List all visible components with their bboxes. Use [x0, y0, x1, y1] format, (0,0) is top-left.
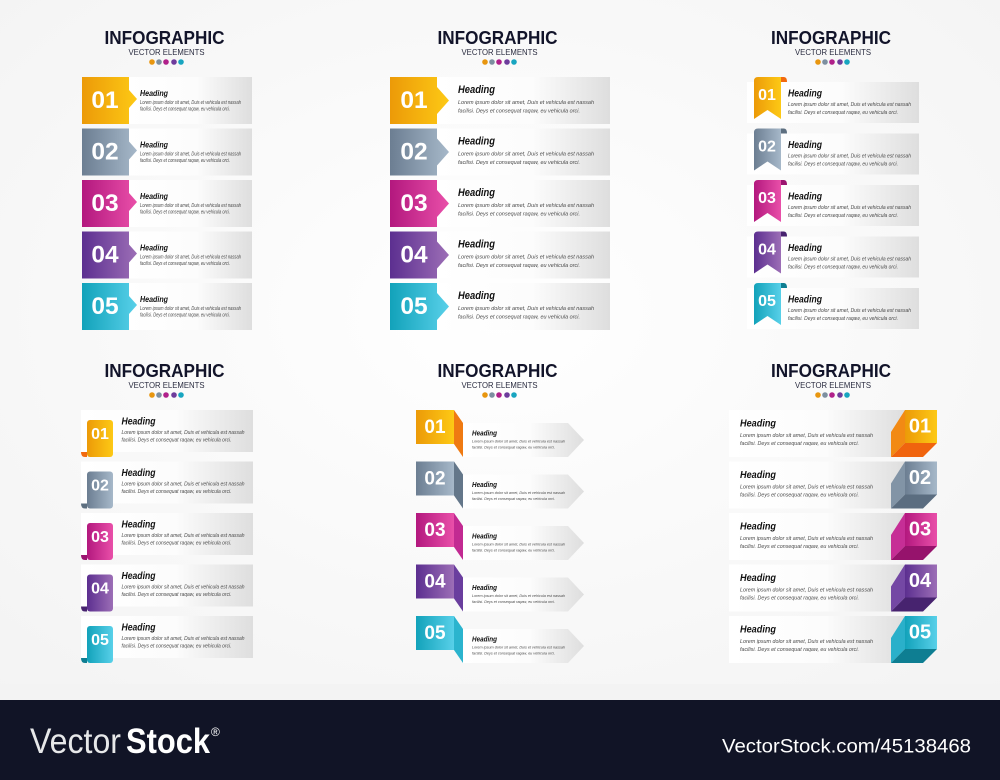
- step 02: [416, 462, 584, 508]
- step 02: 02: [758, 138, 776, 156]
- step 01: Lorem ipsum dolor sit amet, Duis et vehicula est nassah: [788, 102, 911, 108]
- panel: infographic 2, wide arrow tabs: [390, 28, 610, 330]
- step 05: Heading: [740, 624, 777, 636]
- step 04: [82, 232, 252, 278]
- step 02: Lorem ipsum dolor sit amet, Duis et vehicula est nassah: [140, 152, 241, 158]
- step 01: [82, 77, 252, 124]
- step 03: Heading: [740, 520, 777, 532]
- step 02: Lorem ipsum dolor sit amet, Duis et vehicula est nassah: [788, 154, 911, 160]
- step 05: Lorem ipsum dolor sit amet, Duis et vehicula est nassah: [122, 636, 245, 642]
- step 02: facilisi. Deys et consequat raqaw, eu vehicula orci.: [140, 158, 230, 164]
- step 05: [82, 283, 252, 330]
- step 05: [729, 616, 937, 663]
- bottom strip above footer: [0, 684, 1000, 700]
- title block 1: VECTOR ELEMENTS: [128, 47, 205, 57]
- step 03: facilisi. Deys et consequat raqaw, eu vehicula orci.: [788, 213, 898, 219]
- title block 5: [438, 361, 558, 398]
- step 03: 03: [400, 190, 428, 217]
- step 03: [416, 513, 584, 560]
- step 01: 01: [909, 416, 931, 438]
- step 01: facilisi. Deys et consequat raqaw, eu vehicula orci.: [140, 106, 230, 112]
- step 04: Lorem ipsum dolor sit amet, Duis et vehicula est nassah: [458, 254, 594, 260]
- step 05: 05: [91, 293, 119, 320]
- step 01: [747, 77, 919, 123]
- step 05: facilisi. Deys et consequat raqaw, eu vehicula orci.: [472, 650, 555, 656]
- step 02: 02: [91, 478, 109, 494]
- step 01: Lorem ipsum dolor sit amet, Duis et vehicula est nassah: [122, 430, 245, 436]
- step 01: Heading: [458, 84, 495, 96]
- step 05: 05: [400, 293, 428, 320]
- step 04: 04: [424, 572, 446, 592]
- step 02: Heading: [472, 480, 497, 489]
- step 03: Lorem ipsum dolor sit amet, Duis et vehicula est nassah: [458, 203, 594, 209]
- panel: infographic 6, 3D cube tabs: [729, 361, 937, 663]
- step 01: [81, 410, 253, 457]
- step 04: Heading: [140, 242, 169, 252]
- step 05: Lorem ipsum dolor sit amet, Duis et vehicula est nassah: [472, 644, 566, 650]
- step 01: facilisi. Deys et consequat raqaw, eu vehicula orci.: [788, 110, 898, 116]
- step 03: [729, 513, 937, 560]
- step 05: 05: [758, 293, 776, 310]
- step 03: Lorem ipsum dolor sit amet, Duis et vehicula est nassah: [140, 203, 241, 209]
- step 03: [81, 513, 253, 560]
- step 04: Heading: [740, 572, 777, 584]
- footer logo: Stock: [126, 722, 210, 761]
- step 01: Lorem ipsum dolor sit amet, Duis et vehicula est nassah: [140, 100, 241, 106]
- title block 3: INFOGRAPHIC: [771, 28, 891, 48]
- step 03: Lorem ipsum dolor sit amet, Duis et vehicula est nassah: [740, 536, 873, 542]
- step 05: facilisi. Deys et consequat raqaw, eu vehicula orci.: [788, 316, 898, 322]
- step 02: facilisi. Deys et consequat raqaw, eu vehicula orci.: [472, 496, 555, 501]
- step 04: Heading: [788, 243, 822, 254]
- step 05: facilisi. Deys et consequat raqaw, eu vehicula orci.: [140, 312, 230, 318]
- step 01: Heading: [788, 89, 822, 100]
- step 02: Lorem ipsum dolor sit amet, Duis et vehicula est nassah: [458, 152, 594, 158]
- step 02: 02: [909, 467, 931, 489]
- step 02: 02: [91, 138, 119, 166]
- step 05: Heading: [458, 290, 495, 302]
- step 05: [81, 616, 253, 663]
- step 01: Lorem ipsum dolor sit amet, Duis et vehicula est nassah: [472, 438, 566, 444]
- step 05: Lorem ipsum dolor sit amet, Duis et vehicula est nassah: [458, 306, 594, 312]
- title block 4: INFOGRAPHIC: [104, 361, 225, 381]
- step 03: 03: [91, 190, 119, 217]
- panel: infographic 3, bookmark ribbons: [747, 28, 919, 329]
- footer logo: Vector: [30, 722, 121, 761]
- step 01: 01: [400, 87, 428, 114]
- step 04: facilisi. Deys et consequat raqaw, eu vehicula orci.: [740, 596, 859, 602]
- step 02: facilisi. Deys et consequat raqaw, eu vehicula orci.: [122, 489, 232, 495]
- step 01: 01: [758, 87, 776, 104]
- step 05: [390, 283, 610, 330]
- step 01: facilisi. Deys et consequat raqaw, eu vehicula orci.: [740, 441, 859, 447]
- step 04: 04: [91, 242, 119, 268]
- step 05: [747, 283, 919, 329]
- step 03: [82, 180, 252, 227]
- step 03: [747, 180, 919, 226]
- step 02: [81, 462, 253, 508]
- step 03: Heading: [458, 187, 495, 199]
- step 04: Lorem ipsum dolor sit amet, Duis et vehicula est nassah: [740, 588, 873, 594]
- step 01: Heading: [140, 88, 169, 98]
- step 05: facilisi. Deys et consequat raqaw, eu vehicula orci.: [122, 644, 232, 650]
- step 05: Lorem ipsum dolor sit amet, Duis et vehicula est nassah: [140, 306, 241, 312]
- step 05: 05: [91, 632, 109, 649]
- step 01: 01: [424, 417, 446, 438]
- step 05: Heading: [788, 295, 822, 306]
- footer logo: ®: [211, 725, 220, 739]
- step 03: facilisi. Deys et consequat raqaw, eu vehicula orci.: [458, 212, 580, 218]
- step 02: [729, 462, 937, 508]
- step 02: [82, 128, 252, 176]
- step 02: [747, 128, 919, 174]
- step 04: Lorem ipsum dolor sit amet, Duis et vehicula est nassah: [472, 593, 566, 598]
- step 03: [390, 180, 610, 227]
- step 05: 05: [909, 622, 931, 644]
- step 04: [81, 564, 253, 612]
- step 01: Heading: [472, 428, 497, 438]
- step 01: facilisi. Deys et consequat raqaw, eu vehicula orci.: [458, 108, 580, 114]
- step 05: facilisi. Deys et consequat raqaw, eu vehicula orci.: [740, 647, 859, 653]
- step 03: 03: [424, 520, 446, 541]
- step 01: Lorem ipsum dolor sit amet, Duis et vehicula est nassah: [740, 433, 873, 439]
- step 04: facilisi. Deys et consequat raqaw, eu vehicula orci.: [472, 599, 555, 604]
- title block 1: INFOGRAPHIC: [104, 28, 225, 48]
- step 04: Heading: [458, 238, 495, 250]
- step 05: Lorem ipsum dolor sit amet, Duis et vehicula est nassah: [788, 308, 911, 314]
- step 05: Lorem ipsum dolor sit amet, Duis et vehicula est nassah: [740, 639, 873, 645]
- step 02: Lorem ipsum dolor sit amet, Duis et vehicula est nassah: [740, 484, 873, 490]
- step 03: Heading: [788, 192, 822, 203]
- step 04: facilisi. Deys et consequat raqaw, eu vehicula orci.: [140, 261, 230, 267]
- title block 6: VECTOR ELEMENTS: [795, 380, 871, 390]
- step 04: facilisi. Deys et consequat raqaw, eu vehicula orci.: [122, 592, 232, 598]
- panel: infographic 1, arrow tabs: [82, 28, 252, 330]
- panel: infographic 4, rounded tabs: [81, 361, 253, 663]
- title block 3: [771, 28, 891, 65]
- step 04: [416, 564, 584, 612]
- step 04: Lorem ipsum dolor sit amet, Duis et vehicula est nassah: [140, 254, 241, 260]
- step 01: 01: [91, 426, 109, 443]
- step 01: Heading: [122, 416, 156, 428]
- step 02: facilisi. Deys et consequat raqaw, eu vehicula orci.: [458, 160, 580, 166]
- step 04: facilisi. Deys et consequat raqaw, eu vehicula orci.: [458, 263, 580, 269]
- step 04: Heading: [472, 583, 497, 592]
- step 02: Heading: [140, 140, 169, 150]
- step 03: facilisi. Deys et consequat raqaw, eu vehicula orci.: [140, 210, 230, 216]
- title block 6: [771, 361, 891, 398]
- step 04: [390, 232, 610, 278]
- step 05: 05: [424, 623, 446, 644]
- step 03: facilisi. Deys et consequat raqaw, eu vehicula orci.: [740, 544, 859, 550]
- step 04: 04: [400, 242, 428, 268]
- title block 2: [438, 28, 558, 65]
- step 03: Lorem ipsum dolor sit amet, Duis et vehicula est nassah: [122, 533, 245, 539]
- step 05: Heading: [472, 634, 497, 644]
- step 02: facilisi. Deys et consequat raqaw, eu vehicula orci.: [740, 492, 859, 498]
- title block 6: INFOGRAPHIC: [771, 361, 891, 381]
- step 03: Lorem ipsum dolor sit amet, Duis et vehicula est nassah: [472, 542, 566, 546]
- step 01: Lorem ipsum dolor sit amet, Duis et vehicula est nassah: [458, 100, 594, 106]
- title block 4: [104, 361, 225, 398]
- title block 4: VECTOR ELEMENTS: [128, 380, 205, 390]
- step 03: Heading: [122, 520, 156, 530]
- step 05: facilisi. Deys et consequat raqaw, eu vehicula orci.: [458, 314, 580, 320]
- step 03: Heading: [140, 191, 169, 201]
- step 02: Lorem ipsum dolor sit amet, Duis et vehicula est nassah: [122, 482, 245, 488]
- title block 5: INFOGRAPHIC: [438, 361, 558, 381]
- title block 1: [104, 28, 225, 65]
- title block 2: INFOGRAPHIC: [438, 28, 558, 48]
- step 01: facilisi. Deys et consequat raqaw, eu vehicula orci.: [122, 438, 232, 444]
- step 01: Heading: [740, 418, 777, 430]
- step 04: Lorem ipsum dolor sit amet, Duis et vehicula est nassah: [122, 584, 245, 590]
- step 02: 02: [400, 138, 428, 166]
- step 01: facilisi. Deys et consequat raqaw, eu vehicula orci.: [472, 444, 555, 450]
- step 03: facilisi. Deys et consequat raqaw, eu vehicula orci.: [122, 540, 232, 546]
- footer band: [0, 700, 1000, 780]
- step 04: [747, 232, 919, 278]
- step 01: [390, 77, 610, 124]
- title block 3: VECTOR ELEMENTS: [795, 47, 871, 57]
- title block 5: VECTOR ELEMENTS: [462, 380, 538, 390]
- step 05: Heading: [140, 294, 169, 304]
- step 02: Heading: [740, 469, 777, 481]
- step 01: 01: [91, 87, 119, 114]
- step 03: 03: [91, 529, 109, 546]
- step 03: 03: [909, 519, 931, 541]
- panel: infographic 5, folded tabs with arrow cards: [416, 361, 584, 663]
- step 03: facilisi. Deys et consequat raqaw, eu vehicula orci.: [472, 548, 555, 552]
- step 04: 04: [758, 242, 776, 258]
- step 04: 04: [909, 570, 932, 592]
- step 01: [729, 410, 937, 457]
- step 02: Heading: [458, 136, 495, 148]
- step 03: 03: [758, 190, 776, 207]
- step 02: Lorem ipsum dolor sit amet, Duis et vehicula est nassah: [472, 490, 566, 495]
- step 04: Heading: [122, 571, 156, 582]
- step 04: 04: [91, 580, 109, 598]
- step 05: Heading: [122, 622, 156, 634]
- step 03: Lorem ipsum dolor sit amet, Duis et vehicula est nassah: [788, 205, 911, 211]
- step 04: [729, 564, 937, 612]
- footer image id: VectorStock.com/45138468: [722, 737, 971, 758]
- step 02: 02: [424, 468, 446, 490]
- step 01: [416, 410, 584, 457]
- step 02: [390, 128, 610, 176]
- step 02: Heading: [122, 468, 156, 479]
- step 04: facilisi. Deys et consequat raqaw, eu vehicula orci.: [788, 264, 898, 270]
- title block 2: VECTOR ELEMENTS: [462, 47, 538, 57]
- step 02: facilisi. Deys et consequat raqaw, eu vehicula orci.: [788, 162, 898, 168]
- step 03: Heading: [472, 532, 497, 540]
- footer logo: [30, 722, 220, 761]
- step 05: [416, 616, 584, 663]
- step 04: Lorem ipsum dolor sit amet, Duis et vehicula est nassah: [788, 256, 911, 262]
- step 02: Heading: [788, 140, 822, 151]
